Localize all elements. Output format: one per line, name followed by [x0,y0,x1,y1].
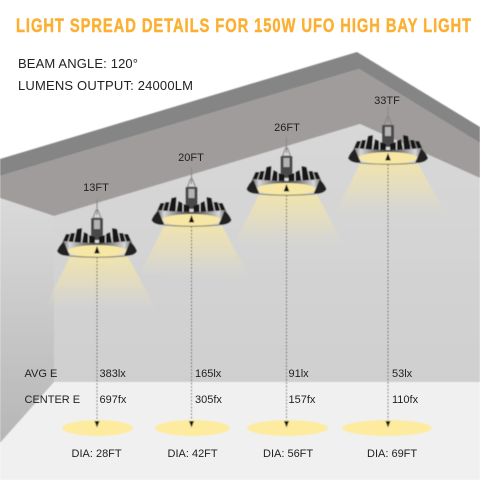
spec text block: LUMENS OUTPUT: 24000LM [18,78,193,93]
average illuminance values: 165lx [195,368,222,380]
left wall [0,198,54,443]
beam diameter labels: DIA: 28FT [72,448,122,460]
spec text block: BEAM ANGLE: 120° [18,56,138,71]
lamp height labels: 26FT [274,122,300,134]
center illuminance values: 157fx [288,394,316,406]
lamp: 20FT [152,168,232,226]
beam diameter labels: DIA: 56FT [263,448,313,460]
lamp: 13FT [57,199,137,257]
ceiling beam: inner face [0,69,480,216]
center illuminance values: 697fx [100,394,127,406]
average illuminance values: 383lx [100,368,126,380]
row labels: CENTER E [24,394,80,406]
back wall [54,124,480,383]
light beams [46,164,447,309]
lamp: 33FT [348,106,428,164]
average illuminance values [100,368,413,380]
ceiling beam: outer edge [0,52,480,176]
center illuminance values [100,394,419,406]
beam diameter labels [72,448,417,460]
floor light pools [62,420,432,436]
center illuminance values: 110fx [392,394,419,406]
center illuminance values: 305fx [195,394,222,406]
lamp height labels [83,95,400,194]
lamp height labels: 33TF [374,95,400,107]
beam diameter labels: DIA: 42FT [168,448,218,460]
down arrowheads [94,421,390,428]
spec text block [18,56,193,93]
floor [0,382,480,480]
lamp height labels: 13FT [83,182,109,194]
average illuminance values: 53lx [392,368,413,380]
row labels: AVG E [24,368,57,380]
beam diameter labels: DIA: 69FT [367,448,417,460]
row labels [24,368,80,406]
average illuminance values: 91lx [288,368,309,380]
lamp height labels: 20FT [178,152,204,164]
lamp: 26FT [246,137,326,195]
dotted drop lines [97,161,388,422]
